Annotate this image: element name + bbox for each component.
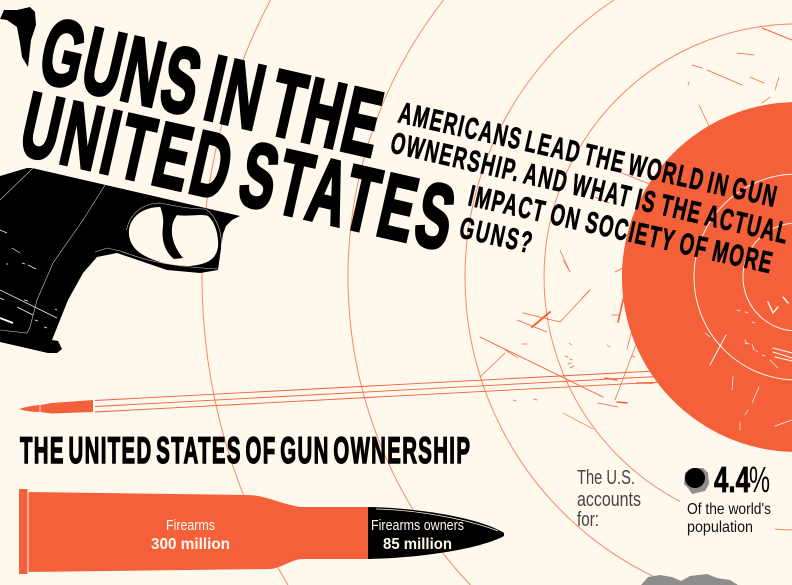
gun highlight lines [0, 168, 221, 333]
section heading: THE UNITED STATES OF GUN OWNERSHIP [20, 431, 470, 472]
trigger guard opening [129, 207, 218, 266]
label: firearms: 300 million [151, 536, 230, 553]
bullet hole scratches on target [480, 28, 792, 429]
casing: firearms [19, 489, 368, 574]
stat: 4.4 percent of population: % [749, 459, 770, 500]
label: owners [371, 517, 464, 553]
bullet tip: owners [368, 507, 504, 559]
stat: 4.4 percent of population: population [687, 519, 753, 536]
title: GUNS IN THE [31, 0, 391, 177]
text: the U.S. accounts for: The U.S. [577, 466, 635, 489]
stat: 4.4 percent of population: 4.4 [714, 459, 750, 500]
background mask behind population stat [680, 460, 775, 538]
speeding bullet trail [19, 371, 660, 414]
subtitle: IMPACT ON SOCIETY OF MORE [465, 179, 775, 280]
icon: small bullet [19, 400, 93, 414]
text: the U.S. accounts for [577, 466, 641, 531]
icon: grey world map top edge [641, 574, 738, 585]
icon: gun silhouette [0, 7, 240, 353]
subtitle [387, 96, 791, 280]
subtitle: OWNERSHIP. AND WHAT IS THE ACTUAL [387, 126, 791, 251]
subtitle: AMERICANS LEAD THE WORLD IN GUN [395, 96, 780, 214]
label: owners: Firearms owners [371, 517, 464, 534]
white scratches inside bullseye [705, 297, 792, 430]
bullet motion lines [95, 371, 660, 412]
target: concentric rings and red bullseye [202, 0, 792, 585]
label: owners: 85 million [383, 536, 452, 553]
bullet chart: firearms vs owners [19, 489, 504, 574]
text: the U.S. accounts for: accounts [577, 488, 641, 511]
stat: 4.4 percent of population: Of the world's [687, 501, 771, 518]
stat: 4.4 percent of population [684, 459, 771, 536]
subtitle: GUNS? [456, 211, 535, 260]
trigger [160, 206, 183, 259]
label: firearms [151, 517, 230, 553]
icon: population dot on world blob [684, 468, 709, 494]
title: UNITED STATES [13, 73, 463, 269]
text: the U.S. accounts for: for: [577, 508, 599, 531]
label: firearms: Firearms [166, 517, 215, 534]
